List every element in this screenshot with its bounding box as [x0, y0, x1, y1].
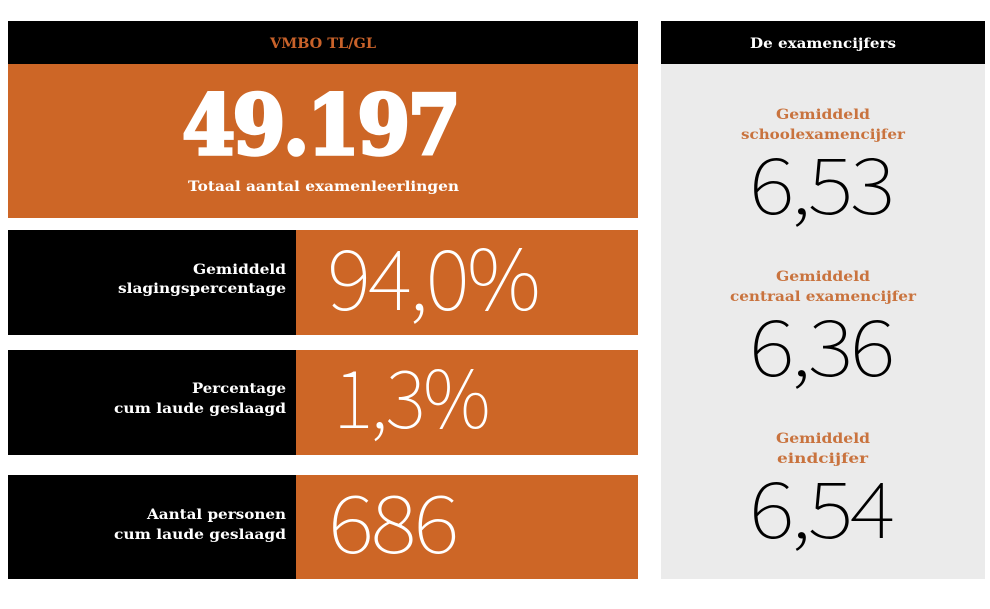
- label: total students: Totaal aantal examenleerlingen: [188, 179, 459, 195]
- grade: school exam: [741, 107, 906, 237]
- panel: cum laude count: [8, 461, 638, 579]
- heading: VMBO TL/GL: VMBO TL/GL: [269, 36, 376, 52]
- panel: exam grades: [661, 21, 985, 579]
- number: cum laude count: 686: [328, 461, 456, 577]
- label: pass rate: slagingspercentage: [118, 281, 286, 297]
- number: pass rate: 94,0%: [327, 214, 538, 335]
- label: cum laude percentage: [114, 381, 286, 417]
- label: cum laude percentage: cum laude geslaagd: [114, 401, 286, 417]
- label: cum laude percentage: Percentage: [192, 381, 286, 397]
- label: cum laude count: [114, 507, 286, 543]
- grade: final: Gemiddeld: [776, 431, 870, 447]
- grade: school exam: Gemiddeld: [776, 107, 870, 123]
- grade: central exam: Gemiddeld: [776, 269, 870, 285]
- label: pass rate: Gemiddeld: [193, 262, 286, 278]
- panel: cum laude percentage: [8, 336, 638, 455]
- grade: central exam: [730, 269, 917, 399]
- panel: total students: [8, 64, 638, 218]
- grade: central exam: centraal examencijfer: [730, 289, 917, 305]
- grade: school exam: 6,53: [749, 125, 892, 237]
- heading: De examencijfers: De examencijfers: [750, 36, 896, 52]
- panel: pass rate: [8, 214, 638, 335]
- label: pass rate: [118, 262, 286, 297]
- number: total students: 49.197: [182, 78, 458, 174]
- grade: school exam: schoolexamencijfer: [741, 127, 906, 143]
- label: cum laude count: Aantal personen: [146, 507, 286, 523]
- label: cum laude count: cum laude geslaagd: [114, 527, 286, 543]
- grade: final: 6,54: [749, 449, 892, 561]
- number: cum laude percentage: 1,3%: [333, 336, 488, 452]
- panel: VMBO TL/GL header: [8, 21, 638, 64]
- grade: central exam: 6,36: [749, 287, 892, 399]
- grade: final: eindcijfer: [777, 451, 869, 467]
